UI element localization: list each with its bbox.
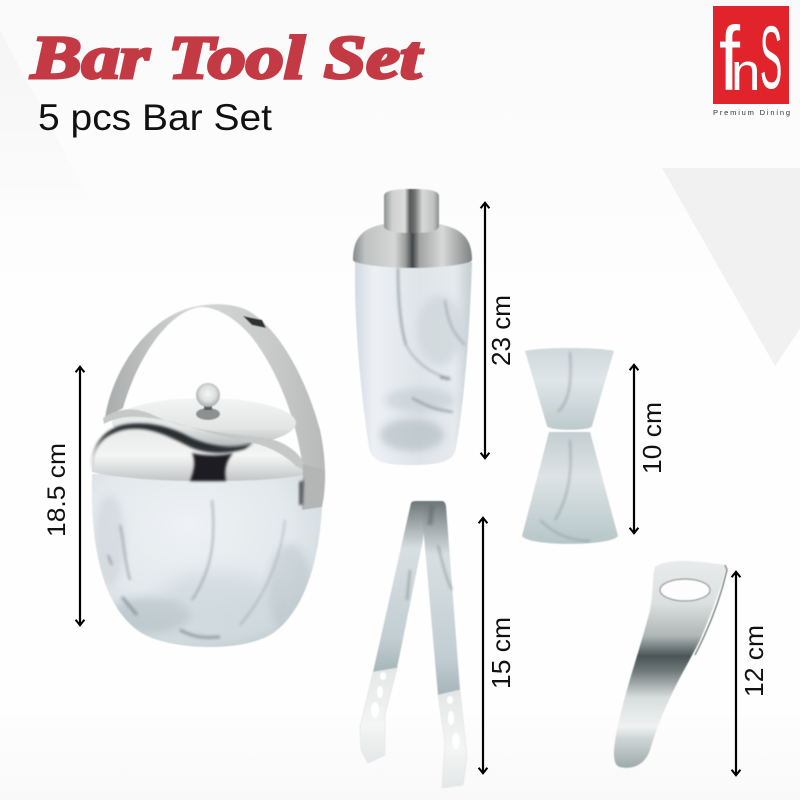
cocktail shaker [353, 189, 472, 465]
bucket handle [105, 304, 325, 510]
title: Bar Tool Set [30, 25, 424, 92]
dimension: tongs length: 15 cm [486, 617, 516, 689]
tongs [360, 501, 467, 788]
logo [713, 6, 790, 117]
shaker shoulder [353, 224, 472, 268]
logo: n [731, 43, 760, 102]
bottle opener [614, 561, 727, 768]
opener hole [660, 579, 710, 601]
tongs left arm marble [373, 501, 428, 672]
jigger top cup [525, 348, 614, 430]
shaker cap [384, 189, 439, 233]
tongs right arm marble [423, 501, 460, 695]
tongs left tip [360, 668, 397, 763]
dimension: shaker height: 23 cm [486, 295, 516, 366]
jigger [522, 348, 618, 544]
bucket body [92, 474, 322, 647]
dimension: bucket height: 18.5 cm [43, 443, 71, 537]
tongs right tip [438, 690, 467, 788]
bucket marble veins [95, 495, 312, 637]
ice bucket [92, 304, 325, 647]
lid band [103, 409, 307, 472]
logo: f [719, 7, 741, 110]
logo: S [760, 9, 782, 108]
bucket lid dome [92, 425, 307, 481]
subtitle: 5 pcs Bar Set [38, 97, 273, 138]
shaker body [355, 262, 472, 465]
jigger bottom cup [522, 432, 618, 544]
bucket knob [196, 383, 220, 420]
bucket lid top [112, 398, 296, 448]
dimension: opener length: 12 cm [739, 625, 769, 697]
dimension: jigger height: 10 cm [637, 402, 667, 474]
logo: Premium Dining [713, 108, 790, 117]
shaker marble veins [380, 268, 465, 451]
